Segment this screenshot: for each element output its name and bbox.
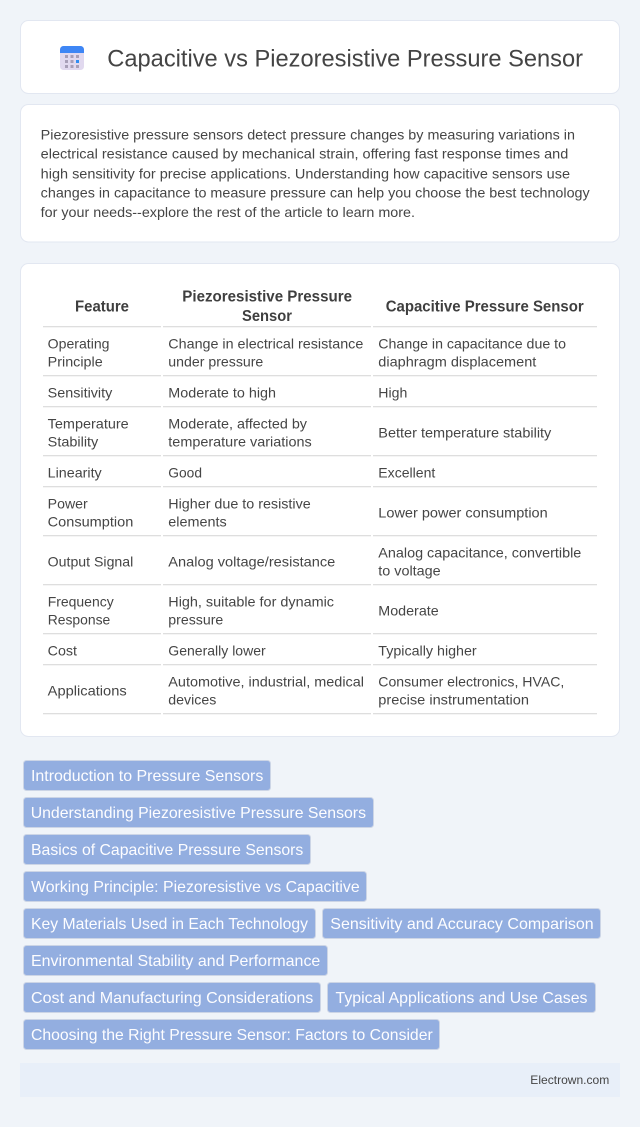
row: operating principle	[48, 335, 566, 369]
panel: comparison table	[20, 264, 620, 736]
row: applications	[48, 673, 564, 707]
row: operating principle: under pressure	[168, 353, 264, 369]
row: cost: Cost	[48, 642, 77, 658]
chip: introduction	[24, 760, 270, 790]
row: operating principle: Principle	[48, 353, 103, 369]
row: frequency response: Frequency	[48, 593, 114, 609]
chip: basics of capacitive	[24, 834, 310, 864]
row: output signal	[48, 544, 582, 578]
row: operating principle: Change in electrical resistance	[168, 335, 364, 351]
chip: understanding piezoresistive: Understanding Piezoresistive Pressure Sensors	[31, 805, 366, 822]
row: frequency response: Response	[48, 611, 111, 627]
row: frequency response: High, suitable for dynamic	[168, 593, 334, 609]
row: temperature stability: Better temperature stability	[378, 424, 551, 440]
row: sensitivity	[48, 384, 407, 400]
chip: key materials	[24, 908, 316, 938]
table header row: Capacitive Pressure Sensor	[386, 299, 584, 316]
row: applications: devices	[168, 691, 216, 707]
chip: understanding piezoresistive	[24, 798, 374, 828]
title: Capacitive vs Piezoresistive Pressure Sensor	[107, 46, 583, 73]
chip: environmental stability: Environmental Stability and Performance	[31, 953, 320, 970]
chip: typical applications	[328, 982, 596, 1012]
intro text: Piezoresistive pressure sensors detect pressure changes by measuring variations in	[41, 126, 575, 142]
chip: working principle	[24, 872, 366, 902]
row: temperature stability: Temperature	[48, 415, 129, 431]
row: sensitivity: Moderate to high	[168, 384, 276, 400]
row: operating principle: diaphragm displacement	[378, 353, 536, 369]
row: sensitivity: Sensitivity	[48, 384, 112, 400]
chip: cost and manufacturing	[24, 982, 320, 1012]
row: applications: Applications	[48, 682, 127, 698]
row: power consumption	[48, 495, 548, 529]
chip: cost and manufacturing: Cost and Manufacturing Considerations	[31, 990, 313, 1007]
chip: choosing the right sensor	[24, 1020, 440, 1050]
chip: sensitivity and accuracy	[322, 908, 600, 938]
row: frequency response: pressure	[168, 611, 224, 627]
chip: choosing the right sensor: Choosing the Right Pressure Sensor: Factors to Consider	[31, 1027, 433, 1044]
intro text: changes in capacitance to measure pressure can help you choose the best technology	[41, 184, 590, 200]
panel: topic chips	[24, 760, 600, 1050]
row: linearity	[48, 464, 435, 480]
row: output signal: Output Signal	[48, 553, 133, 569]
row: power consumption: Higher due to resistive	[168, 495, 311, 511]
chip: typical applications: Typical Applications and Use Cases	[336, 990, 588, 1007]
row: linearity: Good	[168, 464, 202, 480]
panel: introduction	[20, 104, 620, 242]
row: cost: Generally lower	[168, 642, 266, 658]
row: temperature stability	[48, 415, 551, 449]
row: applications: precise instrumentation	[378, 691, 529, 707]
row: frequency response: Moderate	[378, 602, 439, 618]
row: temperature stability: Stability	[48, 433, 98, 449]
row: operating principle: Operating	[48, 335, 110, 351]
row: applications: Consumer electronics, HVAC,	[378, 673, 564, 689]
row: linearity: Linearity	[48, 464, 102, 480]
table header row: Piezoresistive Pressure	[182, 289, 352, 306]
chip: basics of capacitive: Basics of Capacitive Pressure Sensors	[31, 842, 303, 859]
row: output signal: Analog capacitance, convertible	[378, 544, 582, 560]
table header row	[75, 289, 584, 325]
row: applications: Automotive, industrial, medical	[168, 673, 364, 689]
intro text: electrical resistance caused by mechanical strain, offering fast response times and	[41, 146, 568, 162]
row: linearity: Excellent	[378, 464, 435, 480]
row: power consumption: elements	[168, 513, 227, 529]
chip: introduction: Introduction to Pressure Sensors	[31, 768, 263, 785]
icon: calendar grid	[60, 46, 84, 70]
intro text: for your needs--explore the rest of the article to learn more.	[41, 204, 415, 220]
row: output signal: to voltage	[378, 562, 441, 578]
chip: environmental stability	[24, 946, 328, 976]
chip: working principle: Working Principle: Piezoresistive vs Capacitive	[31, 879, 360, 896]
chip: sensitivity and accuracy: Sensitivity and Accuracy Comparison	[330, 916, 594, 933]
row: cost: Typically higher	[378, 642, 477, 658]
row: output signal: Analog voltage/resistance	[168, 553, 336, 569]
row: power consumption: Power	[48, 495, 88, 511]
chip: key materials: Key Materials Used in Each Technology	[31, 916, 308, 933]
footer: Electrown.com	[530, 1073, 609, 1087]
row: temperature stability: Moderate, affected by	[168, 415, 307, 431]
table header row: Feature	[75, 299, 129, 316]
intro text	[41, 126, 590, 220]
row: operating principle: Change in capacitance due to	[378, 335, 566, 351]
panel: title header	[20, 20, 620, 94]
row: sensitivity: High	[378, 384, 407, 400]
row: cost	[48, 642, 477, 658]
table header row: Sensor	[242, 308, 292, 325]
row: power consumption: Lower power consumption	[378, 504, 548, 520]
row: frequency response	[48, 593, 439, 627]
row: power consumption: Consumption	[48, 513, 133, 529]
row: temperature stability: temperature variations	[168, 433, 312, 449]
intro text: high sensitivity for precise applications. Understanding how capacitive sensors use	[41, 165, 570, 181]
footer	[20, 1063, 620, 1097]
